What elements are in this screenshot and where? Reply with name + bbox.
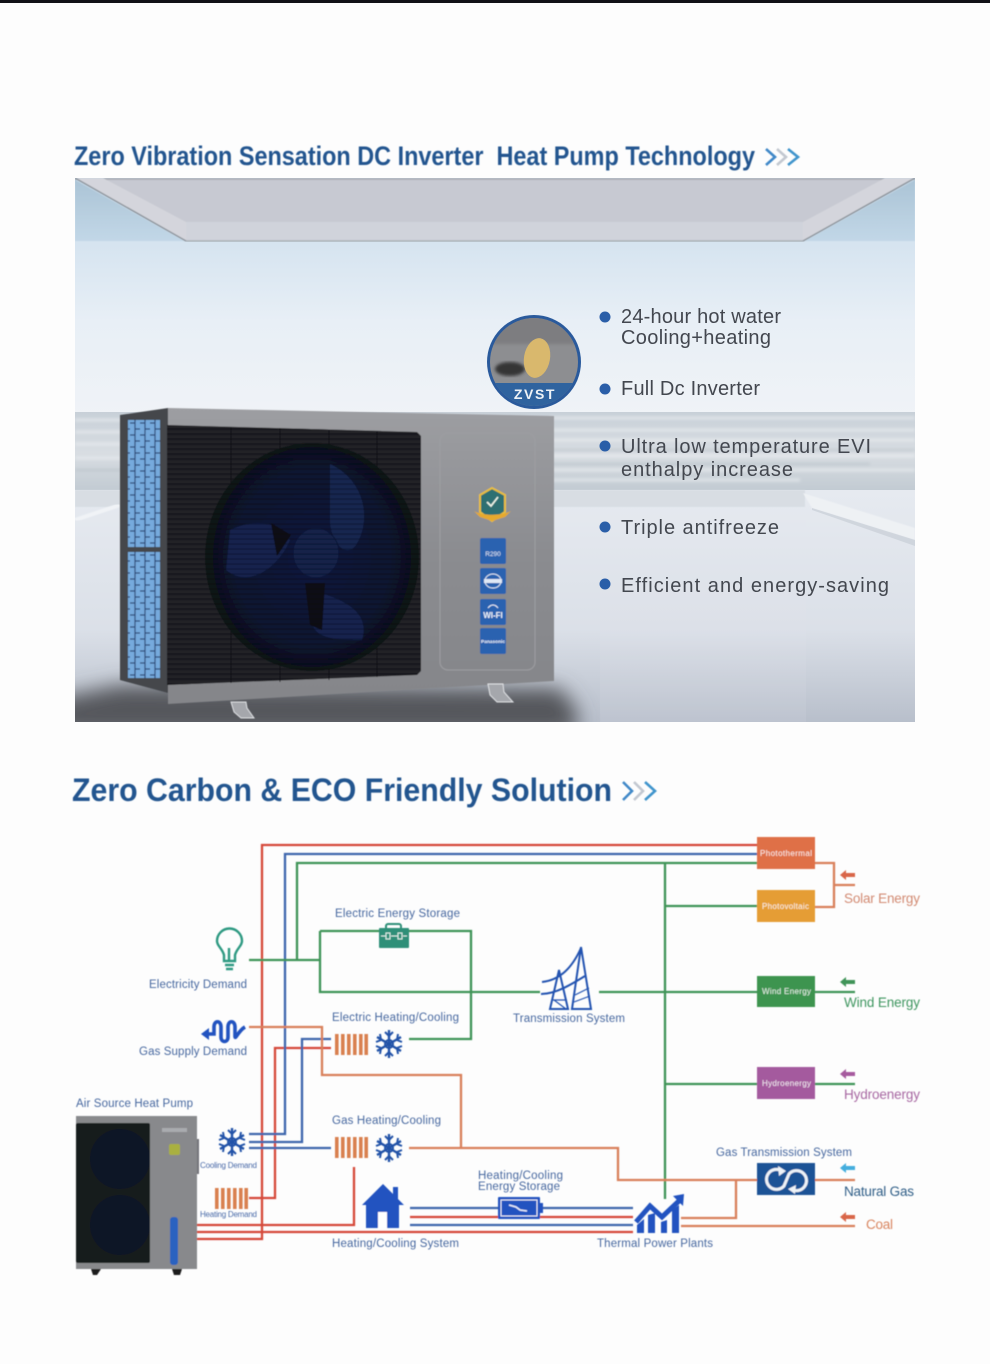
panel: product photo [50,178,915,735]
bullet: hot water [600,306,781,349]
box: hydroenergy [757,1067,815,1099]
bullet: hot water: Cooling+heating [621,327,771,349]
arrow: wind [840,977,855,987]
label: gas transmission system: Gas Transmission System [716,1147,852,1159]
box: photovoltaic: Photovoltaic [762,902,809,911]
badge: R290: R290 [485,551,501,558]
photo background sky [75,178,915,418]
label: heating cooling energy storage: Energy Storage [478,1181,560,1193]
green electricity lines [249,863,855,1199]
bullet: energy saving: Efficient and energy-saving [621,575,889,597]
badge: Panasonic [480,628,506,654]
icon: house [362,1184,404,1228]
icon: electric radiator [335,1034,368,1055]
badge: R290 [480,538,506,564]
box: photothermal: Photothermal [760,849,812,858]
bullet: hot water: 24-hour hot water [621,306,781,328]
icon: electric snowflake [376,1030,402,1058]
small heat pump unit [76,1116,199,1275]
icon: transmission tower [541,947,591,1009]
sea horizon [75,412,915,494]
orange gas lines [249,863,855,1226]
label: natural gas: Natural Gas [844,1184,914,1199]
label: electric energy storage: Electric Energy Storage [335,908,460,920]
arrow: hydro [840,1069,855,1079]
label: gas supply demand: Gas Supply Demand [139,1046,247,1058]
icon: battery [498,1197,543,1219]
label: electric heating cooling: Electric Heating/Cooling [332,1012,459,1024]
label: solar energy: Solar Energy [844,891,920,906]
badge: inverter [480,568,506,594]
badge: Panasonic: Panasonic [481,639,505,645]
box: hydroenergy: Hydroenergy [762,1079,811,1088]
unit fan [205,443,419,671]
heat pump unit illustration [120,408,554,718]
label: wind energy: Wind Energy [844,995,920,1010]
bullet: EVI [600,436,871,481]
arrow: natural gas [840,1163,855,1173]
top black bar [0,0,990,3]
label: heating demand: Heating Demand [200,1210,257,1219]
label: air source heat pump: Air Source Heat Pump [76,1098,193,1110]
bullet: EVI: enthalpy increase [621,459,793,481]
heading: heat pump technology: Zero Vibration Sensation DC Inverter Heat Pump Technology [74,141,755,171]
box: wind energy [757,976,815,1007]
label: coal: Coal [866,1217,893,1232]
label: heating cooling energy storage: Heating/Cooling [478,1170,563,1182]
icon: ZVST coin badge [487,315,581,415]
label: electricity demand: Electricity Demand [149,979,247,991]
icon: gas pipe [201,1022,245,1042]
heading: zero carbon: Zero Carbon & ECO Friendly Solution [72,772,612,808]
unit service panel [440,433,535,670]
box: photothermal [757,837,815,869]
bullet: antifreeze: Triple antifreeze [621,517,779,539]
blue cooling pipes [249,854,757,1225]
label: gas heating cooling: Gas Heating/Cooling [332,1115,441,1127]
arrow: solar [840,870,855,880]
unit body [168,408,554,704]
label: heating cooling energy storage [478,1170,563,1193]
icon: thermal power plants [636,1194,684,1233]
bullet: inverter: Full Dc Inverter [621,378,760,400]
arrow: coal [840,1212,855,1222]
icon: gas snowflake [376,1134,402,1162]
energy flow diagram [76,837,920,1275]
badge label: ZVST [514,386,556,402]
label: transmission system: Transmission System [513,1013,625,1025]
box: photovoltaic [757,890,815,922]
icon: light bulb [217,928,242,969]
icon: shield badge [474,488,511,521]
unit grille [167,425,421,685]
red heat pipes [196,845,757,1239]
label: hydroenergy: Hydroenergy [844,1087,920,1102]
icon: cooling demand snowflake [219,1128,245,1156]
badge: Wi-Fi [480,599,506,625]
unit side mesh panel [120,408,168,693]
label: cooling demand: Cooling Demand [200,1161,257,1170]
label: heating cooling system: Heating/Cooling System [332,1238,459,1250]
ceiling [75,178,915,241]
floor [75,490,915,722]
icon: heating demand radiator [215,1188,248,1209]
box: gas transmission [757,1163,815,1195]
label: thermal power plants: Thermal Power Plants [597,1238,713,1250]
floor shadow under unit [50,685,578,735]
bullet: EVI: Ultra low temperature EVI [621,436,871,458]
unit feet [231,684,513,718]
icon: electric storage case [379,924,409,948]
icon: gas radiator [335,1137,368,1158]
badge: Wi-Fi: WI-FI [483,611,503,620]
box: wind energy: Wind Energy [762,987,811,996]
feature list [600,306,889,597]
